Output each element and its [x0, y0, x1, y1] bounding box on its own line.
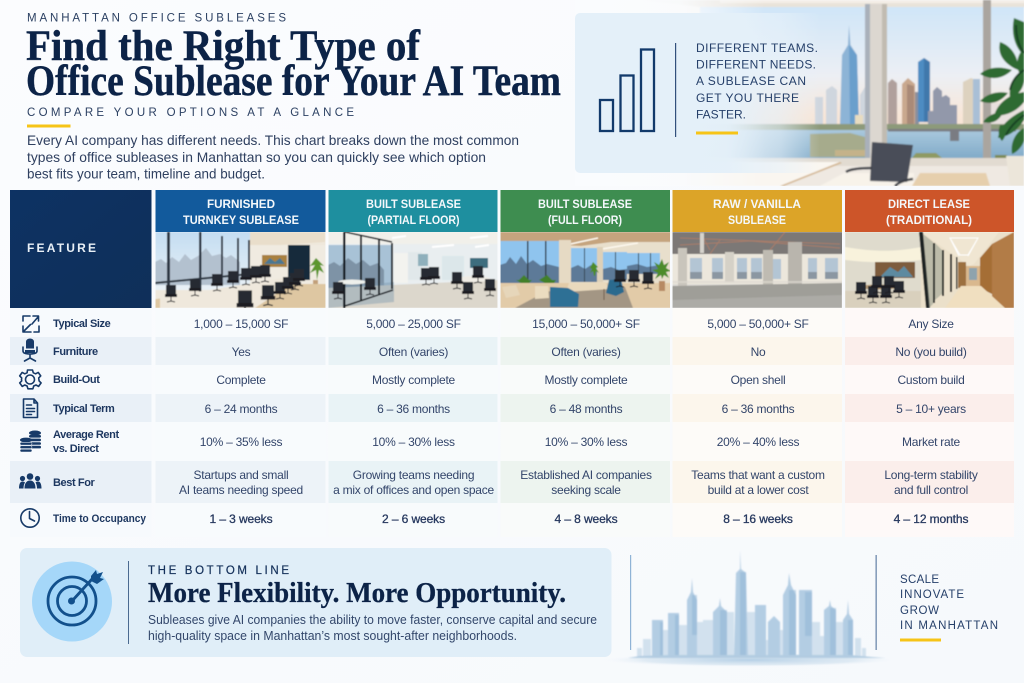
icon: clock: [21, 509, 39, 527]
tagline text: GROW: [900, 605, 939, 617]
row: typical term: Typical Term: [53, 403, 115, 415]
icon: expand arrows: [23, 316, 39, 332]
accent bar: [27, 124, 70, 128]
row: furniture: Yes: [232, 345, 251, 359]
icon: bar chart: [600, 50, 654, 131]
row: typical term: 6 – 24 months: [205, 402, 278, 416]
column header: built partial floor: (PARTIAL FLOOR): [368, 213, 460, 227]
column header: raw vanilla: [672, 190, 842, 232]
intro text: [27, 132, 519, 182]
row: furniture: Often (varies): [551, 345, 621, 359]
row: time to occupancy: 1 – 3 weeks: [210, 512, 273, 526]
row: build-out: Mostly complete: [545, 373, 628, 387]
body text: Subleases give AI companies the ability to move faster, conserve capital and secure: [148, 613, 597, 627]
photo: partial floor office: [328, 232, 498, 308]
row: furniture: Often (varies): [379, 345, 448, 359]
row: average rent: Market rate: [902, 435, 961, 449]
accent bar: [696, 132, 738, 134]
row: time to occupancy: Time to Occupancy: [53, 513, 147, 525]
intro text: best fits your team, timeline and budget.: [27, 166, 265, 182]
row: best for: Established AI companies: [520, 468, 652, 482]
row: average rent: 10% – 35% less: [200, 435, 283, 449]
intro text: Every AI company has different needs. This chart breaks down the most common: [27, 132, 519, 148]
column header: built partial floor: [328, 190, 498, 232]
column header: built full floor: BUILT SUBLEASE: [538, 197, 632, 211]
intro text: types of office subleases in Manhattan so you can quickly see which option: [27, 149, 486, 165]
comparison table: [10, 190, 1015, 537]
column header: furnished turnkey: FURNISHED: [207, 197, 275, 211]
row: typical size: Typical Size: [53, 318, 111, 330]
divider left of skyline: [630, 555, 631, 650]
row: build-out: Custom build: [897, 373, 965, 387]
tagline text: INNOVATE: [900, 589, 964, 601]
column header: direct lease: DIRECT LEASE: [888, 197, 970, 211]
divider right of skyline: [876, 555, 877, 650]
row: time to occupancy: 8 – 16 weeks: [723, 512, 793, 526]
column header: furnished turnkey: TURNKEY SUBLEASE: [183, 213, 299, 227]
row: typical size: 5,000 – 25,000 SF: [366, 317, 461, 331]
row: furniture: Furniture: [53, 346, 98, 358]
column header: built full floor: [500, 190, 670, 232]
row: average rent: 10% – 30% less: [545, 435, 628, 449]
callout text: A SUBLEASE CAN: [696, 74, 806, 88]
feature column heading: [10, 190, 152, 308]
row: time to occupancy: [21, 509, 968, 527]
row: best for: Growing teams needing: [353, 468, 474, 482]
table body backgrounds: [10, 308, 1014, 537]
column header: built full floor: (FULL FLOOR): [548, 213, 622, 227]
callout text: DIFFERENT NEEDS.: [696, 58, 816, 72]
row: build-out: Build-Out: [53, 374, 100, 386]
row: build-out: Mostly complete: [372, 373, 456, 387]
body text: high-quality space in Manhattan’s most sought-after neighborhoods.: [148, 629, 517, 643]
hero photo: office window with skyline: [693, 0, 1024, 186]
subtitle: COMPARE YOUR OPTIONS AT A GLANCE: [27, 107, 354, 119]
eyebrow: manhattan office subleases: MANHATTAN OFFICE SUBLEASES: [27, 12, 286, 24]
photo: raw vanilla shell: [672, 232, 843, 308]
photo: direct lease corridor: [845, 232, 1015, 308]
column header: raw vanilla: SUBLEASE: [728, 213, 786, 227]
accent bar: [900, 638, 941, 642]
callout text: FASTER.: [696, 108, 746, 122]
row: typical size: 5,000 – 50,000+ SF: [707, 317, 809, 331]
tagline text: IN MANHATTAN: [900, 620, 998, 632]
column header: furnished turnkey: [156, 190, 326, 232]
row: time to occupancy: 4 – 8 weeks: [555, 512, 618, 526]
icon: coin stacks: [20, 430, 41, 452]
row: best for: Teams that want a custom: [691, 468, 825, 482]
callout panel: different teams: [575, 13, 820, 173]
callout text: DIFFERENT TEAMS.: [696, 41, 818, 55]
row: furniture: No (you build): [895, 345, 967, 359]
photo: full floor lounge: [500, 232, 671, 308]
row: typical term: 6 – 36 months: [722, 402, 795, 416]
title: Find the Right Type of: [26, 23, 421, 70]
row: furniture: [23, 338, 967, 361]
row: average rent: [20, 429, 961, 455]
illustration: city skyline: [600, 550, 900, 667]
row: build-out: [20, 370, 965, 389]
row: typical term: 5 – 10+ years: [896, 402, 966, 416]
icon: document: [24, 399, 38, 418]
row: best for: Long-term stability: [884, 468, 978, 482]
title: Office Sublease for Your AI Team: [26, 58, 561, 105]
body text: [148, 613, 597, 643]
row: average rent: 10% – 30% less: [372, 435, 455, 449]
row: average rent: vs. Direct: [53, 443, 99, 455]
row: build-out: Complete: [216, 373, 266, 387]
row: typical term: 6 – 36 months: [377, 402, 450, 416]
column header: direct lease: (TRADITIONAL): [886, 213, 972, 227]
column header: raw vanilla: RAW / VANILLA: [713, 197, 801, 211]
icon: office chair: [23, 338, 37, 361]
row: best for: AI teams needing speed: [179, 483, 303, 497]
column header: built partial floor: BUILT SUBLEASE: [366, 197, 461, 211]
row: typical term: 6 – 48 months: [550, 402, 623, 416]
photo: furnished conference room: [156, 232, 326, 308]
row: average rent: 20% – 40% less: [717, 435, 800, 449]
row: best for: seeking scale: [551, 483, 621, 497]
row: typical term: [24, 399, 966, 418]
tagline text: SCALE: [900, 574, 939, 586]
feature column heading: FEATURE: [27, 241, 96, 255]
row: best for: Best For: [53, 477, 96, 489]
divider line: [128, 561, 129, 644]
row: best for: [19, 468, 978, 497]
tagline text: [900, 574, 998, 632]
row: best for: a mix of offices and open space: [333, 483, 494, 497]
callout text: GET YOU THERE: [696, 91, 799, 105]
title: [26, 23, 561, 105]
icon: target with arrow: [32, 562, 112, 642]
callout text: [696, 41, 818, 122]
row: time to occupancy: 2 – 6 weeks: [382, 512, 445, 526]
row: average rent: Average Rent: [53, 429, 119, 441]
icon: gear: [20, 370, 41, 389]
panel: the bottom line: [20, 548, 612, 657]
row: best for: build at a lower cost: [708, 483, 809, 497]
icon: people: [19, 473, 42, 488]
row: best for: and full control: [894, 483, 968, 497]
divider line: [675, 43, 676, 137]
row: time to occupancy: 4 – 12 months: [894, 512, 968, 526]
label: THE BOTTOM LINE: [148, 565, 289, 577]
column header: direct lease: [845, 190, 1014, 232]
row: furniture: No: [751, 345, 766, 359]
row: typical size: 15,000 – 50,000+ SF: [532, 317, 640, 331]
headline: More Flexibility. More Opportunity.: [148, 578, 566, 609]
row: typical size: Any Size: [908, 317, 954, 331]
row: typical size: [23, 316, 954, 332]
row: typical size: 1,000 – 15,000 SF: [194, 317, 288, 331]
row: build-out: Open shell: [731, 373, 785, 387]
row: best for: Startups and small: [194, 468, 288, 482]
